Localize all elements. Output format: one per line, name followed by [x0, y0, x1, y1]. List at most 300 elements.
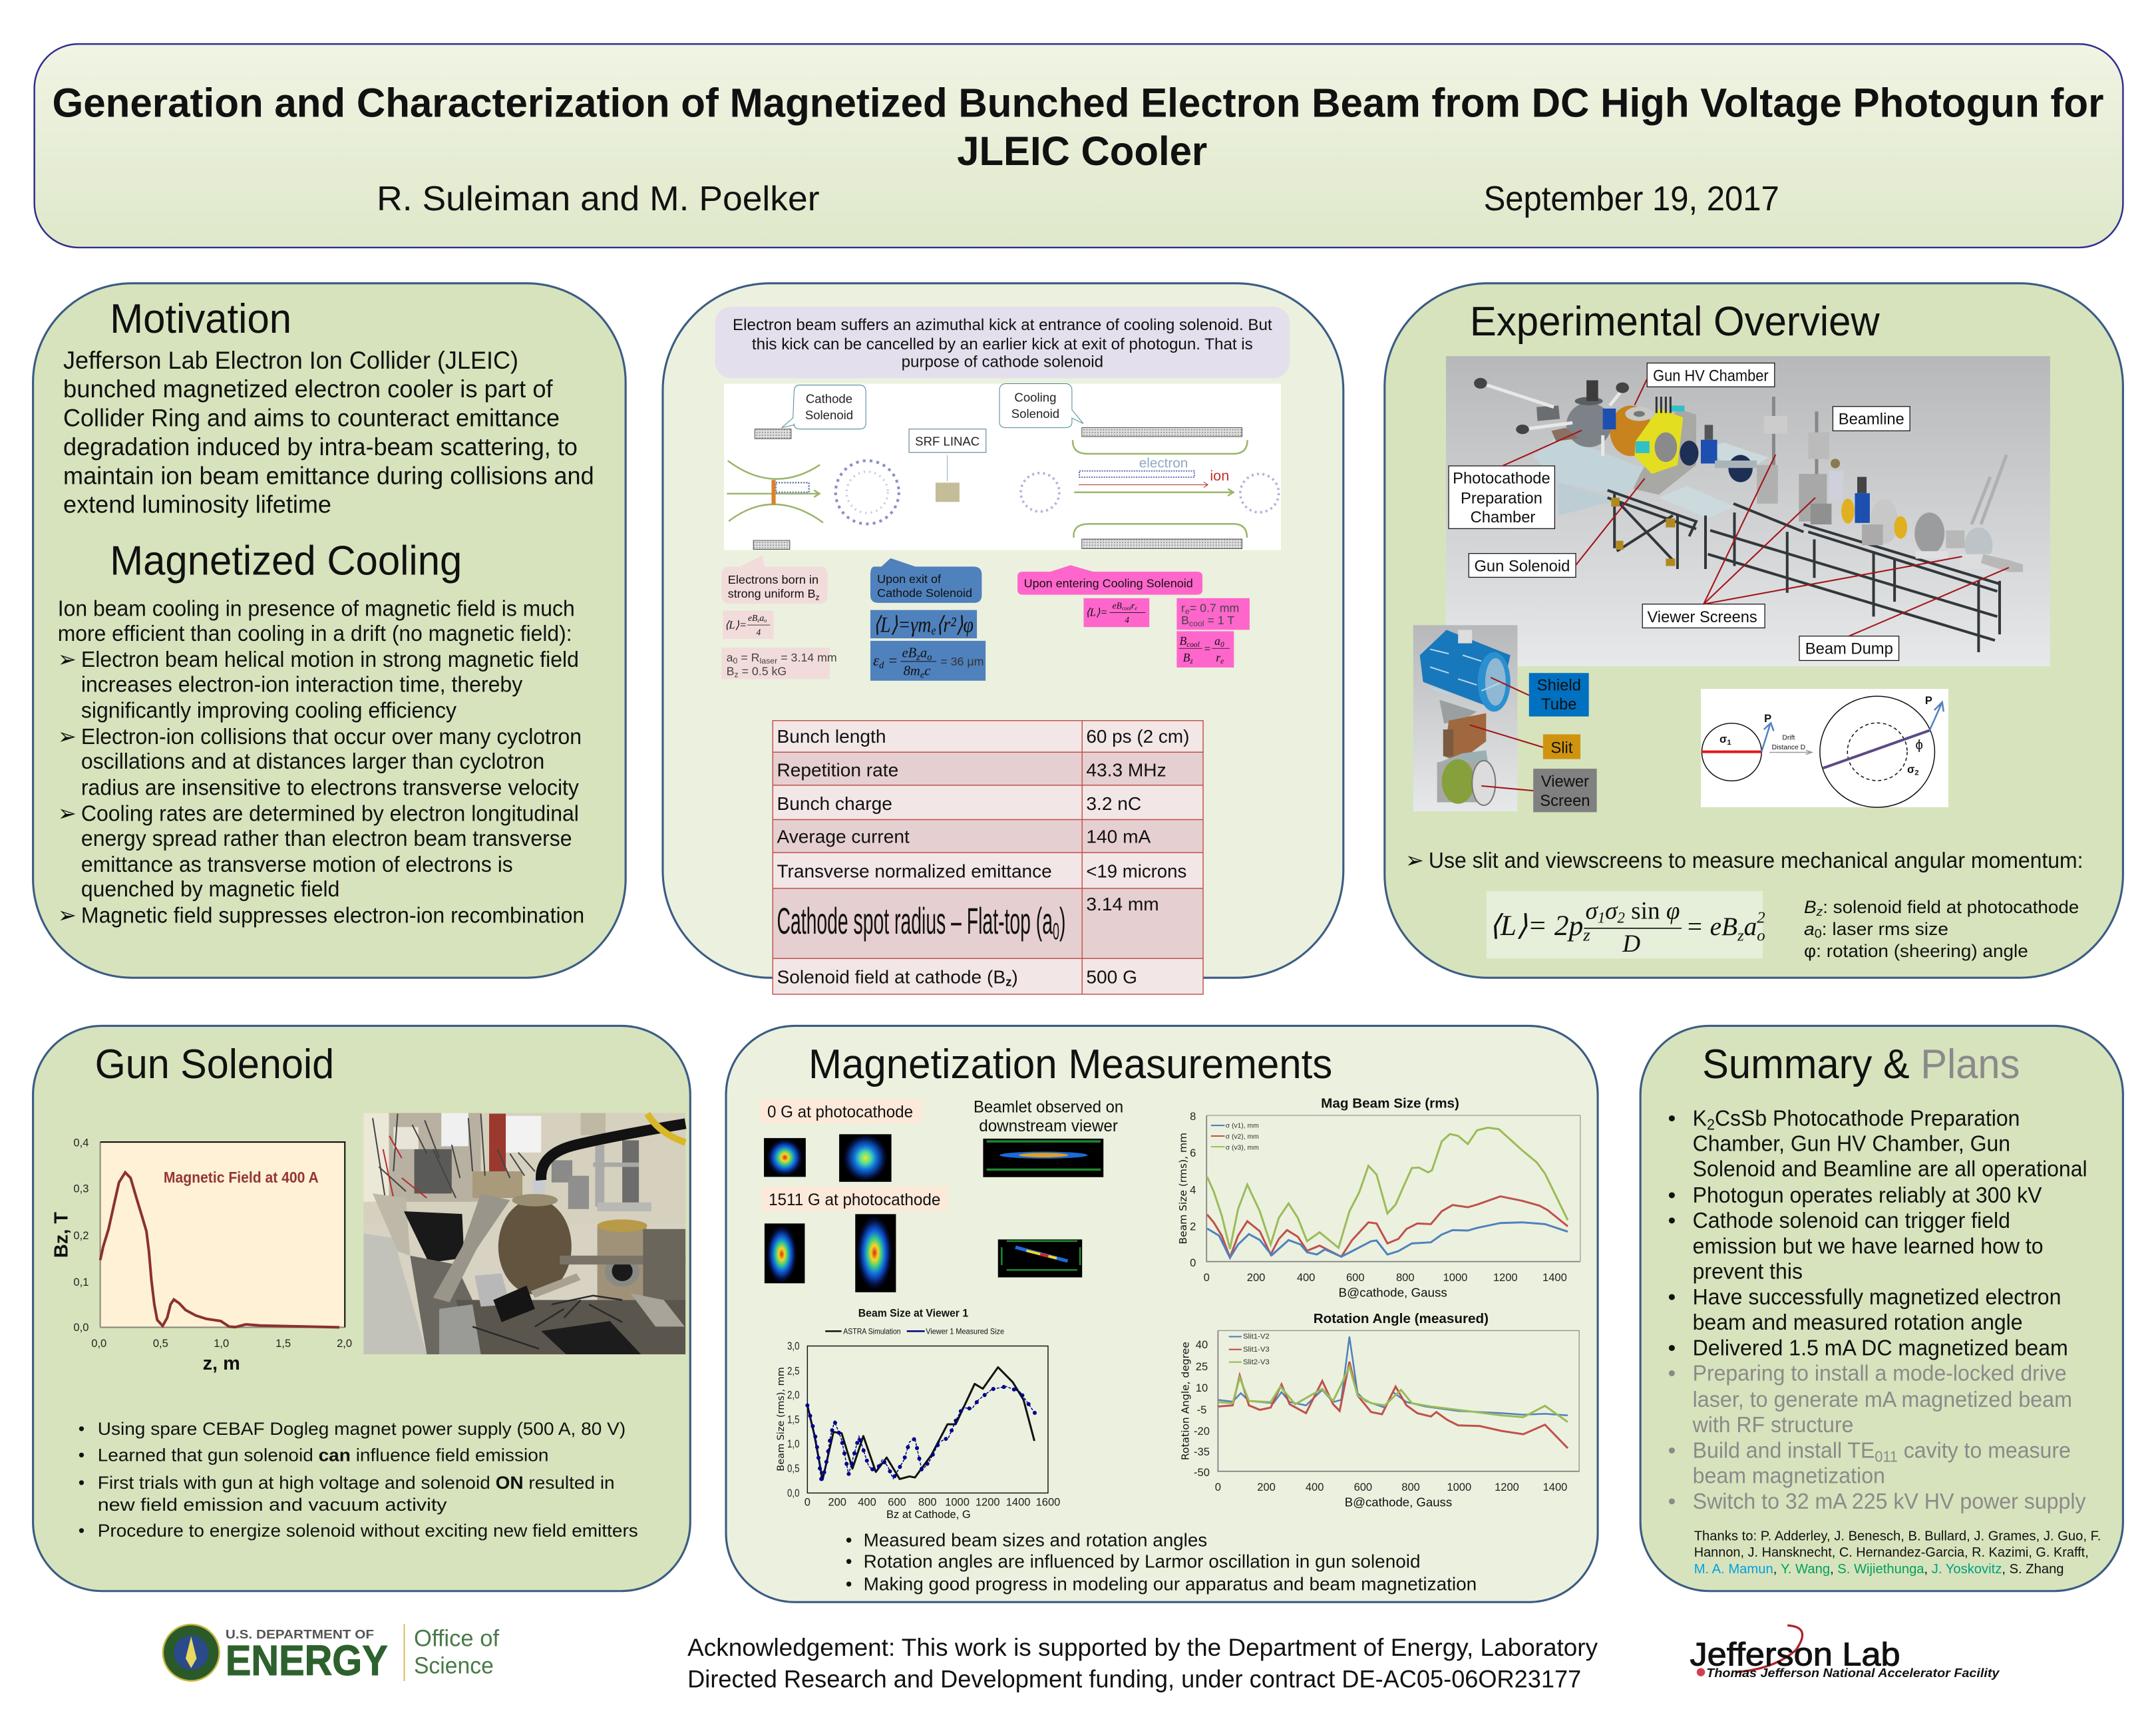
plans bullets: • — [1668, 1489, 1676, 1514]
label: beamline: Beamline — [1839, 410, 1904, 428]
logo: DOE Office of Science: Office of — [414, 1625, 499, 1651]
formula: mechanical angular momentum: z — [1737, 926, 1744, 944]
chart: beam size at viewer 1: 1000 — [945, 1496, 970, 1509]
field lines at cathode — [727, 461, 823, 522]
plans bullets — [1668, 1362, 2086, 1514]
leader lines — [1470, 677, 1543, 791]
formula: mechanical angular momentum: 1 — [1598, 910, 1605, 926]
magnetized cooling text: significantly improving cooling efficiency — [81, 699, 456, 723]
table: beam parameters: 3.14 mm — [1086, 894, 1159, 914]
ticks: 25 — [1196, 1360, 1208, 1373]
motivation text: extend luminosity lifetime — [63, 490, 331, 518]
table: beam parameters — [773, 721, 1203, 994]
chart title: Rotation Angle (measured) — [1314, 1311, 1489, 1326]
callout: electrons born in strong field: z — [816, 592, 820, 602]
summary bullets: prevent this — [1693, 1260, 1803, 1284]
plans bullets: with RF structure — [1692, 1413, 1853, 1438]
parameters: laser radius and field: = 3.14 mm — [777, 651, 837, 664]
label: photocathode preparation chamber: Chamber — [1471, 508, 1535, 526]
formula: mechanical angular momentum — [1487, 891, 1765, 958]
formula: canonical momentum: ⟨r²⟩φ — [936, 613, 974, 637]
chart: beam size at viewer 1 — [776, 1307, 1060, 1521]
magnetized cooling text: ➢ — [58, 723, 77, 749]
chart: beam size at viewer 1: 200 — [828, 1496, 846, 1509]
chart: beam size at viewer 1: 1400 — [1006, 1496, 1030, 1509]
formula: cathode angular momentum: o — [764, 618, 767, 624]
ticks: 8 — [1190, 1110, 1196, 1123]
DOE seal — [163, 1625, 220, 1681]
symbols on diagram — [1719, 694, 1932, 777]
label: gun solenoid: Gun Solenoid — [1474, 558, 1570, 576]
parameters: laser radius and field: = R — [737, 651, 759, 664]
summary bullets: 2 — [1707, 1115, 1715, 1133]
beam cross-section before cooler — [1021, 473, 1059, 512]
summary bullets: Have successfully magnetized electron — [1693, 1285, 2061, 1310]
curves — [807, 1367, 1035, 1481]
table: beam parameters: <19 microns — [1086, 861, 1186, 881]
ticks: -50 — [1194, 1466, 1210, 1479]
symbols on diagram: 1 — [1727, 739, 1731, 747]
label: gun solenoid — [1469, 554, 1576, 577]
ticks — [787, 1340, 800, 1499]
formula: field ratio: = — [1204, 642, 1211, 655]
acknowledgement text: Directed Research and Development funding, under contract DE-AC05-06OR23177 — [687, 1664, 1581, 1692]
axis titles: Bz at Cathode, G — [886, 1508, 971, 1521]
beam images at 1511 G — [765, 1214, 896, 1292]
legend: σ (v1), mm — [1226, 1122, 1259, 1129]
formula: canonical momentum — [870, 610, 977, 638]
legend: formula symbols: z — [1816, 904, 1823, 918]
formula: field ratio: B — [1183, 651, 1190, 664]
ticks — [1194, 1338, 1567, 1493]
legend: formula symbols: : solenoid field at photocathode — [1823, 897, 2079, 917]
parameters: laser radius and field: z — [734, 670, 739, 679]
magnetized cooling text: emittance as transverse motion of electrons is — [81, 853, 513, 877]
gun solenoid bullet list: new field emission and vacuum activity — [98, 1495, 447, 1515]
callout: azimuthal kick explanation: purpose of cathode solenoid — [902, 353, 1103, 371]
formula: field ratio: a — [1214, 634, 1220, 648]
label: viewer screen — [1533, 769, 1597, 812]
ticks: 1400 — [1542, 1271, 1567, 1284]
ticks: 4 — [1190, 1184, 1196, 1197]
table: beam parameters: Average current — [777, 827, 910, 847]
ticks: 2,5 — [787, 1364, 800, 1377]
acknowledgements of contributors: Hannon, J. Hansknecht, C. Hernandez-Garcia, R. Kazimi, G. Krafft, — [1694, 1545, 2089, 1560]
curves — [1218, 1336, 1568, 1448]
parameters: cooling radius and field: = 1 T — [1204, 614, 1234, 627]
magnetized cooling text: oscillations and at distances larger than cyclotron — [81, 749, 544, 774]
table: beam parameters: 0 — [1053, 918, 1059, 944]
magnetized cooling text — [58, 597, 584, 928]
ticks: 600 — [1354, 1481, 1372, 1493]
ticks — [1190, 1110, 1567, 1284]
label: beamline — [1833, 407, 1910, 431]
label: gun HV chamber: Gun HV Chamber — [1653, 367, 1769, 385]
callout: electrons born in strong field: strong uniform B — [728, 587, 816, 600]
callout: upon exit of cathode solenoid: Upon exit of — [877, 572, 942, 586]
ticks: -20 — [1194, 1425, 1210, 1438]
label: beam dump: Beam Dump — [1805, 640, 1893, 658]
gun solenoid bullet list: First trials with gun at high voltage and solenoid ON resulted in — [98, 1473, 615, 1493]
summary bullets: CsSb Photocathode Preparation — [1715, 1106, 2020, 1131]
table: beam parameters: Transverse normalized emittance — [777, 861, 1052, 881]
axis titles: B@cathode, Gauss — [1339, 1286, 1447, 1300]
ticks: 1400 — [1543, 1481, 1567, 1493]
callout: cooling solenoid: Cooling — [1014, 390, 1056, 404]
cathode solenoid coils — [753, 429, 791, 549]
table: beam parameters: 43.3 MHz — [1086, 759, 1167, 780]
ticks: 40 — [1196, 1338, 1208, 1351]
table: beam parameters: Cathode spot radius – Flat-top (a — [777, 900, 1320, 942]
logo: Jefferson Lab: Thomas Jefferson National Accelerator Facility — [1706, 1666, 2000, 1680]
formula: cooling angular momentum: e — [1135, 605, 1137, 611]
ticks: -35 — [1194, 1445, 1210, 1458]
callout: upon exit of cathode solenoid: Cathode Solenoid — [877, 586, 972, 600]
parameters: cooling radius and field: = 0.7 mm — [1190, 602, 1239, 615]
poster title — [53, 81, 2103, 174]
x axis ticks: 1,5 — [275, 1337, 291, 1350]
formula: mechanical angular momentum: φ — [1666, 897, 1680, 924]
title banner — [35, 44, 2123, 248]
ticks: 0,0 — [787, 1487, 800, 1499]
chart: rotation angle — [1179, 1311, 1579, 1509]
summary bullets: • — [1668, 1336, 1676, 1360]
legend — [1211, 1122, 1259, 1151]
beam cross-section after cathode — [836, 461, 899, 524]
y axis ticks: 0,1 — [73, 1276, 89, 1288]
formula: canonical momentum: e — [931, 624, 936, 638]
plans bullets: Preparing to install a mode-locked drive — [1693, 1362, 2067, 1386]
legend: formula symbols: B — [1804, 897, 1817, 917]
ion arrow and label — [1079, 467, 1229, 488]
chart: beam size at viewer 1: 800 — [918, 1496, 937, 1509]
formula: field ratio — [1176, 631, 1234, 668]
formula: cathode angular momentum: a — [759, 613, 764, 623]
ticks: 400 — [1306, 1481, 1324, 1493]
gun solenoid bullet list: Learned that gun solenoid can influence field emission — [98, 1445, 548, 1465]
magnetized cooling text: Magnetic field suppresses electron-ion recombination — [81, 904, 584, 928]
ticks: 1000 — [1443, 1271, 1467, 1284]
table: beam parameters: ) — [1059, 900, 1065, 942]
formula: mechanical angular momentum: a — [1744, 912, 1757, 941]
beamlet image rotated — [998, 1239, 1082, 1277]
acknowledgements of contributors — [1694, 1528, 2101, 1577]
table: beam parameters: Bunch charge — [777, 793, 892, 814]
axis titles: B@cathode, Gauss — [1345, 1495, 1452, 1509]
label: shield tube — [1529, 673, 1589, 717]
symbols on diagram: σ — [1907, 763, 1914, 775]
formula: mechanical angular momentum: 2 — [1618, 910, 1625, 926]
formula: emittance: eB — [902, 646, 916, 661]
formula: emittance: a — [920, 646, 927, 661]
formula: cooling angular momentum: eB — [1113, 600, 1122, 610]
label: viewer screen: Screen — [1540, 792, 1590, 810]
panel: summary and plans — [1640, 1026, 2123, 1591]
parameters: cooling radius and field: B — [1181, 614, 1189, 627]
magnetization bullet list: • — [846, 1530, 852, 1551]
formula: emittance: e — [920, 670, 925, 681]
magnetized cooling text: ➢ — [58, 801, 77, 827]
poster title: JLEIC Cooler — [957, 128, 1207, 174]
formula: field ratio: z — [1189, 658, 1193, 666]
callout: upon entering cooling solenoid — [1017, 565, 1202, 595]
ticks: 1000 — [1447, 1481, 1471, 1493]
gun solenoid bullet list: • — [79, 1473, 85, 1493]
label: photocathode preparation chamber: Preparation — [1461, 489, 1542, 507]
formula: emittance: = — [884, 652, 898, 669]
callout: cathode solenoid: Cathode — [806, 391, 852, 405]
summary bullets: • — [1668, 1183, 1676, 1208]
ticks: -5 — [1197, 1404, 1206, 1416]
label: photocathode preparation chamber: Photocathode — [1453, 469, 1550, 487]
leader lines to components — [1503, 379, 2009, 636]
formula: emittance: c — [924, 664, 930, 679]
legend: Slit2-V3 — [1243, 1358, 1270, 1366]
formula: mechanical angular momentum: D — [1622, 930, 1640, 958]
magnetization bullet list: Rotation angles are influenced by Larmor oscillation in gun solenoid — [864, 1551, 1421, 1572]
heading: motivation: Motivation — [110, 296, 291, 342]
label: shield tube: Shield — [1537, 676, 1581, 694]
callout: cooling solenoid — [999, 384, 1083, 428]
ticks: 200 — [1247, 1271, 1265, 1284]
cooling field lines — [1073, 440, 1248, 538]
logo: DOE Office of Science: ENERGY — [226, 1636, 388, 1684]
label: viewer screens — [1642, 604, 1765, 628]
panel: cathode solenoid explanation and parameters — [663, 284, 1344, 994]
ticks: 200 — [1257, 1481, 1276, 1493]
formula: cooling angular momentum: cool — [1122, 605, 1132, 611]
axis titles — [1177, 1133, 1447, 1300]
linac block — [936, 455, 960, 502]
gun solenoid bullet list: • — [79, 1445, 85, 1465]
parameters: laser radius and field: laser — [759, 656, 777, 666]
table: beam parameters: 3.2 nC — [1086, 793, 1141, 814]
parameters: laser radius and field: a — [727, 651, 733, 664]
parameters: cooling radius and field: r — [1181, 602, 1185, 615]
chart title: Beam Size at Viewer 1 — [858, 1307, 968, 1320]
formula: mechanical angular momentum: σ — [1605, 897, 1618, 924]
gun solenoid bullet list: • — [79, 1521, 85, 1541]
legend: σ (v3), mm — [1226, 1144, 1259, 1151]
legend: Slit1-V3 — [1243, 1346, 1270, 1354]
axis titles: z, m — [203, 1353, 240, 1374]
panel: motivation and magnetized cooling — [33, 284, 626, 978]
ticks: 0 — [1190, 1256, 1196, 1269]
formula: mechanical angular momentum: z — [1582, 924, 1590, 944]
y axis ticks: 0,0 — [73, 1321, 89, 1334]
formula: emittance: 8m — [904, 664, 920, 679]
field curve — [100, 1173, 339, 1327]
label: beamlet observed — [974, 1099, 1123, 1135]
table: beam parameters: Repetition rate — [777, 759, 898, 780]
symbols on diagram: P — [1764, 712, 1771, 725]
table: beam parameters: 60 ps (2 cm) — [1086, 726, 1189, 747]
label: viewer screen: Viewer — [1541, 773, 1589, 791]
gun solenoid bullet list: • — [79, 1419, 85, 1439]
table: beam parameters: Bunch length — [777, 726, 886, 747]
formula: cathode angular momentum: 4 — [756, 628, 761, 638]
beam images at 0 G — [764, 1134, 892, 1182]
formula: canonical momentum: ⟨L⟩=γm — [873, 613, 942, 637]
symbols on diagram: Distance D — [1772, 744, 1805, 751]
formula: field ratio: 0 — [1220, 641, 1224, 649]
ticks: 1,0 — [787, 1438, 800, 1450]
plans bullets: cavity to measure — [1898, 1438, 2071, 1463]
logo: Jefferson Lab: Jefferson Lab — [1690, 1635, 1900, 1672]
ion arrow and label: ion — [1210, 467, 1229, 484]
motivation text: degradation induced by intra-beam scattering, to — [63, 433, 578, 461]
magnetized cooling text: increases electron-ion interaction time, thereby — [81, 672, 522, 697]
plans bullets: • — [1668, 1438, 1676, 1463]
callout: electrons born in strong field — [721, 555, 828, 604]
ticks: 800 — [1396, 1271, 1415, 1284]
panel: experimental overview — [1385, 284, 2123, 978]
ticks: 600 — [1346, 1271, 1365, 1284]
parameters: cooling radius and field: e — [1185, 607, 1190, 616]
plans bullets: laser, to generate mA magnetized beam — [1693, 1388, 2072, 1412]
acknowledgements of contributors: Thanks to: P. Adderley, J. Benesch, B. Bullard, J. Grames, J. Guo, F. — [1694, 1528, 2101, 1543]
table: beam parameters: ) — [1011, 966, 1018, 987]
symbols on diagram: σ — [1719, 733, 1727, 745]
authors: R. Suleiman and M. Poelker — [377, 179, 820, 218]
summary bullets — [1668, 1106, 2087, 1360]
axis titles: Beam Size (rms), mm — [1177, 1133, 1189, 1245]
axis titles — [51, 1212, 240, 1374]
formula: mechanical angular momentum: ⟨L⟩= 2p — [1489, 910, 1583, 942]
magnetized cooling text: Electron-ion collisions that occur over many cyclotron — [81, 725, 582, 749]
poster title: Generation and Characterization of Magnetized Bunched Electron Beam from DC High Voltage Photogun for — [53, 81, 2103, 126]
symbols on diagram: P — [1925, 694, 1932, 707]
label: 0 G at photocathode — [760, 1099, 922, 1123]
logo: Jefferson Lab — [1690, 1625, 2000, 1680]
formula: field ratio: B — [1179, 634, 1186, 648]
x axis ticks: 1,0 — [214, 1337, 229, 1350]
formula: mechanical angular momentum: = eB — [1686, 912, 1737, 941]
heading: summary and plans: Summary & Plans — [1702, 1042, 2020, 1087]
ticks: 0 — [1204, 1271, 1210, 1284]
label: 0 G at photocathode: 0 G at photocathode — [767, 1103, 913, 1121]
ticks: 800 — [1401, 1481, 1420, 1493]
formula: cooling angular momentum — [1083, 598, 1149, 627]
heading: experimental overview: Experimental Overview — [1470, 299, 1880, 345]
symbols on diagram: 2 — [1914, 769, 1919, 777]
callout: upon exit of cathode solenoid — [870, 558, 982, 603]
callout: cathode solenoid — [782, 385, 866, 429]
ticks: 0,5 — [787, 1462, 800, 1475]
chart: beam size at viewer 1: 0 — [805, 1496, 810, 1509]
plans bullets: Build and install TE — [1693, 1438, 1884, 1463]
motivation text: Jefferson Lab Electron Ion Collider (JLEIC) — [63, 346, 518, 374]
magnetized cooling text: ➢ — [58, 902, 77, 928]
axis titles: Rotation Angle, degree — [1179, 1342, 1191, 1460]
axis titles: Beam Size (rms), mm — [776, 1367, 787, 1471]
curves — [1207, 1127, 1568, 1258]
acknowledgement text: Acknowledgement: This work is supported by the Department of Energy, Laboratory — [687, 1633, 1598, 1661]
formula: cathode angular momentum: z — [757, 618, 760, 624]
callout: cathode solenoid: Solenoid — [805, 408, 853, 422]
formula: cooling angular momentum: ⟨L⟩= — [1085, 606, 1108, 619]
date: September 19, 2017 — [1484, 179, 1779, 218]
heading: magnetized cooling: Magnetized Cooling — [110, 538, 462, 584]
acknowledgement text — [687, 1633, 1598, 1692]
label: 1511 G at photocathode — [762, 1187, 948, 1211]
figure: shield tube, slit and viewer — [1413, 625, 1597, 812]
axis titles — [1179, 1342, 1452, 1509]
ticks: 2,0 — [787, 1388, 800, 1401]
formula: mechanical angular momentum: o — [1757, 926, 1765, 944]
table: beam parameters: 140 mA — [1086, 827, 1151, 847]
legend: formula symbols: 0 — [1815, 926, 1822, 940]
symbols on diagram: Drift — [1782, 735, 1795, 742]
chart: beam size at viewer 1: 1600 — [1036, 1496, 1060, 1509]
formula: field ratio: r — [1216, 651, 1220, 664]
formula: mechanical angular momentum: σ — [1585, 897, 1598, 924]
ticks: 1200 — [1495, 1481, 1519, 1493]
formula: cathode angular momentum: eB — [748, 613, 757, 623]
y axis ticks — [73, 1136, 89, 1334]
cooling solenoid coils — [1082, 428, 1242, 548]
motivation text: Collider Ring and aims to counteract emittance — [63, 404, 560, 432]
magnetized cooling text: Cooling rates are determined by electron longitudinal — [81, 802, 579, 827]
y axis ticks: 0,4 — [73, 1136, 89, 1149]
y axis ticks: 0,2 — [73, 1229, 89, 1242]
label: beam dump — [1799, 636, 1899, 660]
text: slit measurement: Use slit and viewscreens to measure mechanical angular momentum: — [1429, 849, 2083, 873]
panel: magnetization measurements — [726, 1026, 1598, 1602]
parameters: laser radius and field: 0 — [733, 656, 738, 666]
legend: Viewer 1 Measured Size — [926, 1326, 1004, 1336]
electron spiral and label: electron — [1139, 456, 1188, 471]
parameters: cooling radius and field: cool — [1189, 619, 1204, 628]
y axis ticks: 0,3 — [73, 1183, 89, 1195]
curve label: Magnetic Field at 400 A — [164, 1169, 319, 1186]
magnetized cooling text: quenched by magnetic field — [81, 877, 339, 902]
SRF linac label — [909, 429, 986, 453]
chart: magnetic field vs z — [51, 1136, 352, 1374]
chart: beam size at viewer 1: 400 — [858, 1496, 876, 1509]
gun solenoid bullet list: Procedure to energize solenoid without exciting new field emitters — [98, 1521, 638, 1541]
summary bullets: Chamber, Gun HV Chamber, Gun — [1693, 1132, 2010, 1157]
legend: formula symbols: : laser rms size — [1822, 919, 1948, 939]
x axis ticks: 0,5 — [153, 1337, 168, 1350]
motivation text: bunched magnetized electron cooler is part of — [63, 375, 553, 403]
legend — [1229, 1333, 1270, 1366]
formula: cathode angular momentum — [723, 610, 774, 639]
photo: gun solenoid installation — [363, 1113, 685, 1354]
legend — [825, 1326, 1004, 1336]
magnetization bullet list — [846, 1530, 1477, 1595]
gun solenoid bullet list: Using spare CEBAF Dogleg magnet power supply (500 A, 80 V) — [98, 1419, 626, 1439]
magnetized cooling text: ➢ — [58, 646, 77, 672]
beamlet image unrotated — [983, 1139, 1103, 1177]
logo: DOE Office of Science — [163, 1624, 499, 1684]
x axis ticks — [91, 1337, 352, 1350]
summary bullets: K — [1693, 1106, 1707, 1131]
callout: azimuthal kick explanation — [715, 307, 1290, 378]
symbols on diagram: ϕ — [1915, 737, 1923, 753]
heading: magnetization measurements: Magnetization Measurements — [808, 1042, 1332, 1087]
label: shield tube: Tube — [1541, 695, 1576, 713]
ticks: 0 — [1215, 1481, 1221, 1493]
magnetization bullet list: • — [846, 1574, 852, 1595]
summary bullets: Photogun operates reliably at 300 kV — [1693, 1183, 2042, 1208]
ticks: 1200 — [1493, 1271, 1518, 1284]
summary bullets: • — [1668, 1285, 1676, 1310]
logo: DOE Office of Science: U.S. DEPARTMENT OF — [226, 1627, 374, 1641]
motivation text — [63, 346, 594, 518]
summary bullets: • — [1668, 1106, 1676, 1131]
beam cross-section after cooler — [1240, 474, 1279, 512]
